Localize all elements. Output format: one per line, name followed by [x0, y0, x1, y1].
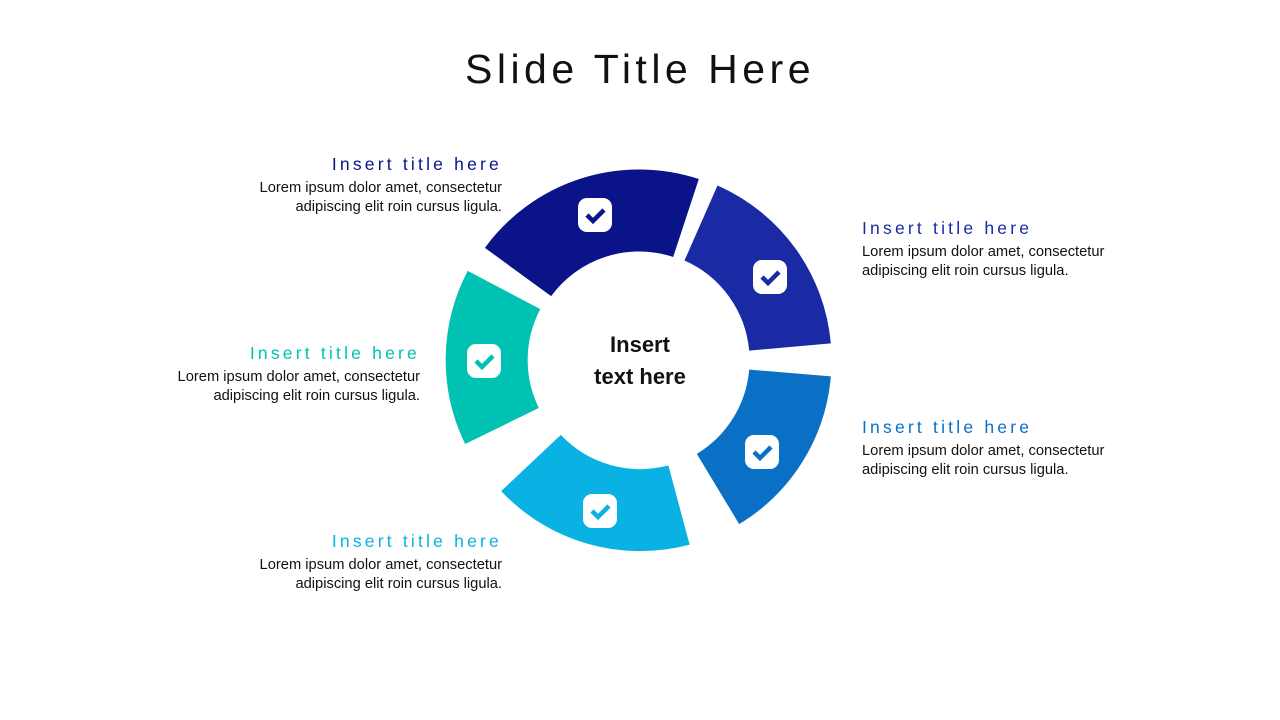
text block: top-right: Lorem ipsum dolor amet, consectetur	[862, 244, 1104, 260]
text block: top-right	[862, 218, 1104, 279]
text block: bottom-right: Lorem ipsum dolor amet, consectetur	[862, 443, 1104, 459]
text block: bottom-right: Insert title here	[862, 417, 1032, 437]
text block: top-left: Insert title here	[332, 154, 502, 174]
title: Slide Title Here	[465, 46, 815, 92]
segment: bottom	[531, 463, 679, 528]
segment: bottom-right	[718, 373, 790, 489]
segment: top	[518, 198, 686, 272]
text block: left: adipiscing elit roin cursus ligula.	[213, 388, 420, 404]
center text	[594, 332, 686, 389]
text block: bottom-left: Insert title here	[332, 531, 502, 551]
text block: top-left: Lorem ipsum dolor amet, consectetur	[260, 180, 502, 196]
text block: bottom-left	[260, 531, 502, 592]
center text: Insert	[610, 332, 670, 357]
segment: top-right	[701, 223, 790, 347]
text block: bottom-right: adipiscing elit roin cursus ligula.	[862, 462, 1069, 478]
text block: left: Lorem ipsum dolor amet, consectetur	[178, 369, 420, 385]
text block: left: Insert title here	[250, 343, 420, 363]
center text: text here	[594, 364, 686, 389]
text block: top-left: adipiscing elit roin cursus ligula.	[295, 199, 502, 215]
segment: left	[467, 290, 504, 426]
text block: left	[178, 343, 420, 404]
text block: bottom-right	[862, 417, 1104, 478]
text block: top-right: adipiscing elit roin cursus ligula.	[862, 263, 1069, 279]
text block: bottom-left: adipiscing elit roin cursus ligula.	[295, 576, 502, 592]
text block: top-right: Insert title here	[862, 218, 1032, 238]
text block: top-left	[260, 154, 502, 215]
text block: bottom-left: Lorem ipsum dolor amet, consectetur	[260, 557, 502, 573]
